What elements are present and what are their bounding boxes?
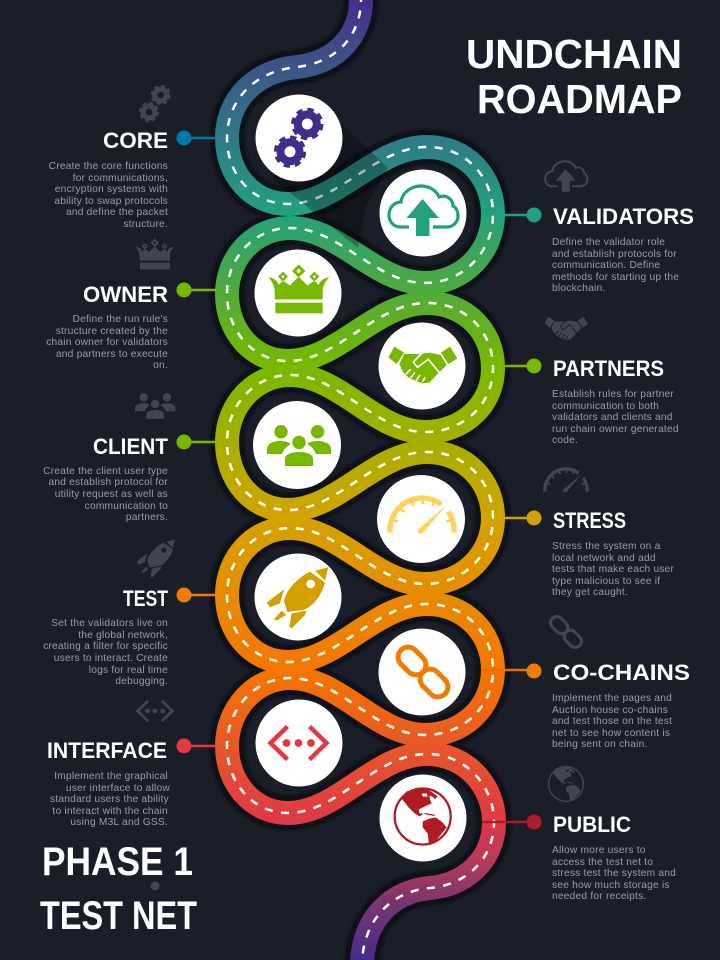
icon: gears — [276, 110, 322, 166]
icon: chain — [394, 643, 452, 701]
description: test: users to interact. Create — [54, 653, 168, 664]
description: partners: validators and clients and — [552, 412, 673, 423]
description: client: utility request as well as — [55, 489, 168, 500]
description: interface: using M3L and GSS. — [70, 817, 168, 828]
panel: interface — [47, 701, 216, 828]
roadmap road — [227, 0, 494, 960]
description: partners: Establish rules for partner — [552, 389, 674, 400]
panel: client — [43, 393, 216, 523]
description: test: creating a filter for specific — [43, 641, 168, 652]
description: validators: communication. Define — [552, 260, 660, 271]
phase label: PHASE 1 — [42, 840, 193, 884]
panel: owner — [46, 239, 216, 371]
icon: ghost chain — [548, 614, 584, 650]
description: test: the global network, — [78, 630, 168, 641]
icon: people — [267, 425, 331, 466]
description: core: structure. — [123, 219, 168, 230]
icon: ghost cloud — [545, 161, 587, 192]
description: stress: they get caught. — [552, 587, 628, 598]
panel: test — [43, 540, 216, 687]
title: ROADMAP — [477, 76, 682, 122]
connector: partners — [504, 358, 542, 374]
heading: stress: STRESS — [553, 508, 626, 533]
description: co-chains: and test those on the test — [552, 716, 672, 727]
description: test: debugging. — [115, 676, 168, 687]
description: owner: Define the run rule's — [73, 314, 168, 325]
panel: stress — [504, 469, 675, 598]
description: client: partners. — [126, 512, 168, 523]
node: handshake — [378, 322, 466, 410]
heading: interface: INTERFACE — [47, 738, 167, 763]
connector: owner — [176, 282, 216, 298]
panel: co-chains — [482, 614, 690, 750]
description: validators: Define the validator role — [552, 237, 665, 248]
description: partners: communication to both — [552, 401, 659, 412]
description: partners: code. — [552, 435, 578, 446]
icon: code — [270, 726, 326, 760]
icon: handshake — [388, 347, 457, 383]
icon: ghost gauge — [545, 469, 587, 492]
node: chain — [378, 628, 466, 716]
heading: validators: VALIDATORS — [553, 204, 694, 229]
description: validators: blockchain. — [552, 283, 605, 294]
description: stress: tests that make each user — [552, 564, 675, 575]
description: interface: standard users the ability — [50, 794, 170, 805]
description: co-chains: net to see how content is — [552, 728, 670, 739]
icon: rocket — [267, 567, 328, 628]
connector: core — [176, 130, 216, 146]
description: interface: to interact with the chain — [52, 806, 168, 817]
description: stress: Stress the system on a — [552, 541, 661, 552]
description: partners: run chain owner generated — [552, 424, 679, 435]
node: rocket — [254, 554, 342, 640]
description: public: access the test net to — [552, 857, 653, 868]
description: core: Create the core functions — [49, 161, 168, 172]
description: validators: and establish protocols for — [552, 249, 677, 260]
heading: owner: OWNER — [83, 282, 168, 307]
panel: core — [49, 86, 216, 230]
title: UNDCHAIN — [466, 31, 682, 77]
icon: ghost globe — [549, 767, 583, 801]
icon: ghost gears — [140, 86, 170, 121]
heading: client: CLIENT — [93, 434, 169, 459]
node: people — [253, 401, 341, 489]
description: stress: local network and add — [552, 553, 656, 564]
panel: partners — [504, 317, 679, 446]
icon: crown — [269, 264, 329, 313]
description: co-chains: Implement the pages and — [552, 693, 672, 704]
node: code — [256, 700, 342, 786]
description: owner: structure created by the — [56, 326, 168, 337]
description: interface: Implement the graphical — [54, 771, 168, 782]
description: owner: and partners to execute — [56, 349, 168, 360]
node: crown — [254, 250, 342, 336]
description: core: for communications, — [73, 173, 168, 184]
title — [466, 31, 682, 122]
panel: validators — [504, 161, 694, 294]
connector: stress — [504, 510, 542, 526]
description: stress: type malicious to see if — [552, 576, 660, 587]
node: upload cloud — [380, 170, 466, 256]
heading: core: CORE — [103, 128, 168, 153]
description: public: stress test the system and — [552, 868, 676, 879]
connector: client — [176, 434, 216, 450]
connector: test — [176, 588, 216, 602]
node: globe — [380, 774, 466, 862]
icon: gauge — [390, 498, 454, 534]
heading: co-chains: CO-CHAINS — [553, 660, 690, 685]
icon: ghost crown — [136, 239, 174, 269]
description: public: needed for receipts. — [552, 891, 646, 902]
panel: public — [482, 767, 676, 902]
description: owner: on. — [153, 360, 168, 371]
heading: test: TEST — [123, 586, 168, 611]
icon: upload cloud — [389, 186, 458, 236]
heading: partners: PARTNERS — [553, 356, 664, 381]
heading: public: PUBLIC — [553, 812, 631, 837]
description: core: and define the packet — [66, 207, 168, 218]
icon: ghost handshake — [545, 317, 588, 340]
description: client: Create the client user type — [43, 466, 168, 477]
description: test: Set the validators live on — [51, 618, 168, 629]
icon: globe — [395, 788, 451, 844]
description: interface: user interface to allow — [66, 783, 170, 794]
description: co-chains: being sent on chain. — [552, 739, 648, 750]
description: validators: methods for starting up the — [552, 272, 679, 283]
connector: public — [482, 814, 542, 830]
phase label: TEST NET — [40, 894, 197, 938]
connector: interface — [176, 738, 216, 754]
icon: ghost people — [135, 393, 175, 419]
description: public: see how much storage is — [552, 880, 670, 891]
connector: validators — [504, 208, 542, 222]
node: gears — [256, 94, 342, 182]
description: co-chains: Auction house co-chains — [552, 705, 668, 716]
node: gauge — [377, 475, 465, 563]
description: client: communication to — [85, 501, 168, 512]
description: core: encryption systems with — [55, 184, 168, 195]
description: test: logs for real time — [89, 665, 168, 676]
connector: co-chains — [482, 664, 542, 678]
description: core: ability to swap protocols — [54, 196, 168, 207]
description: public: Allow more users to — [552, 845, 646, 856]
icon: ghost code — [138, 701, 172, 721]
long shadow from gears node — [272, 125, 388, 248]
description: client: and establish protocol for — [48, 477, 168, 488]
phase label — [40, 840, 197, 938]
description: owner: chain owner for validators — [46, 337, 168, 348]
icon: ghost rocket — [137, 540, 175, 578]
